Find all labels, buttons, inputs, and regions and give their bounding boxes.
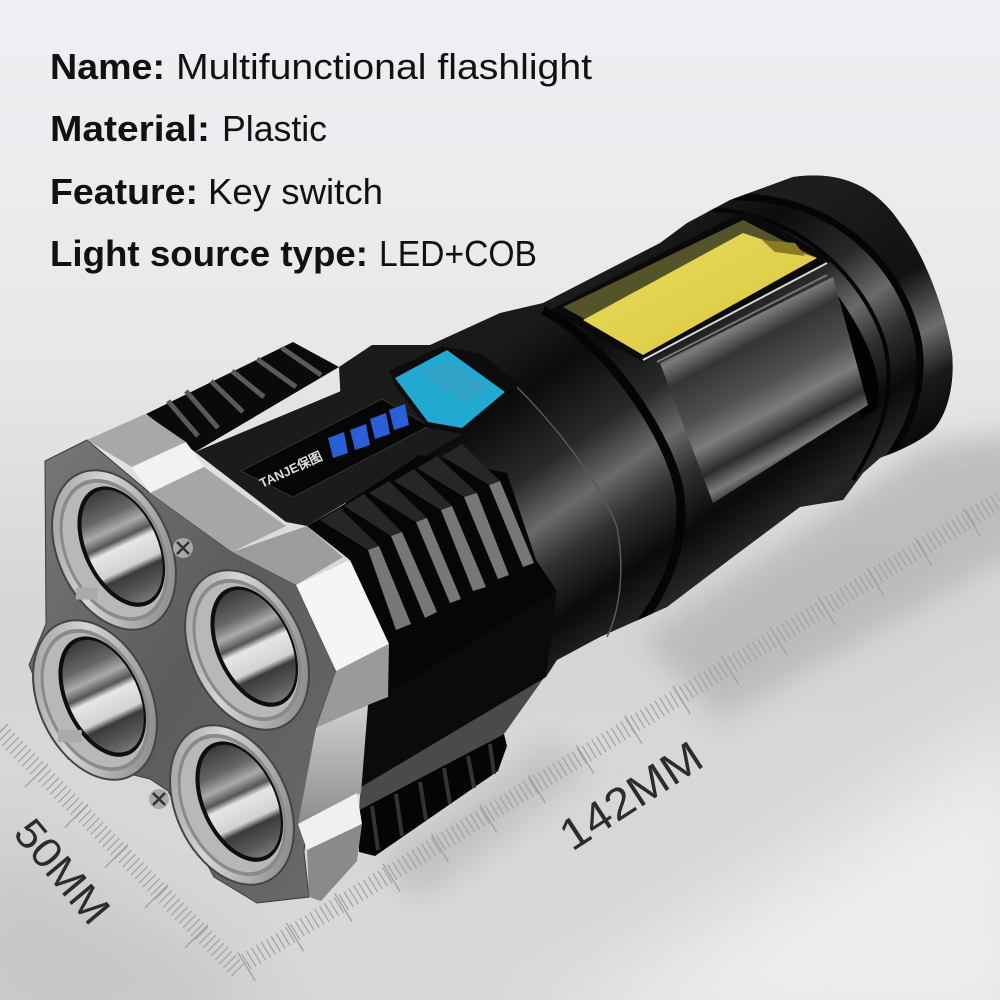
flashlight barrel — [339, 176, 953, 751]
label: 50MM: 50MM — [5, 810, 120, 933]
silver chamfers — [87, 414, 389, 901]
brand label: TANJE保图 — [257, 449, 325, 491]
ruler: 142MM — [246, 500, 1000, 967]
barrel grooves — [543, 197, 920, 640]
tail cap — [738, 176, 953, 454]
spec: name: Name: — [50, 46, 165, 87]
spec: light source: Light source type: — [50, 233, 368, 274]
COB light panel — [550, 210, 833, 362]
lens: top right — [161, 550, 333, 750]
spec: material: Plastic — [222, 108, 327, 149]
battery indicators — [328, 404, 409, 458]
smooth side band — [361, 591, 557, 787]
ruler: 50MM — [0, 731, 240, 976]
lower cooling fins — [359, 675, 546, 856]
label: 142MM: 142MM — [551, 732, 712, 860]
brand label plate — [241, 399, 429, 497]
spec: material: Material: — [50, 108, 210, 149]
screws — [149, 538, 193, 809]
blue key switch — [389, 346, 518, 434]
head front plate — [29, 440, 336, 903]
lens: top left — [28, 450, 200, 650]
milled grip panel — [660, 277, 879, 503]
spec: feature: Key switch — [208, 171, 383, 212]
lens: bottom right — [146, 705, 318, 905]
lens: bottom left — [9, 600, 181, 800]
spec: feature: Feature: — [50, 171, 198, 212]
spec: light source: LED+COB — [379, 233, 537, 274]
rear top cooling fins — [146, 342, 339, 452]
flashlight — [9, 160, 970, 905]
side cooling fins — [307, 444, 557, 693]
specification text — [50, 46, 592, 274]
control panel — [195, 371, 470, 526]
spec: name: Multifunctional flashlight — [176, 46, 592, 87]
